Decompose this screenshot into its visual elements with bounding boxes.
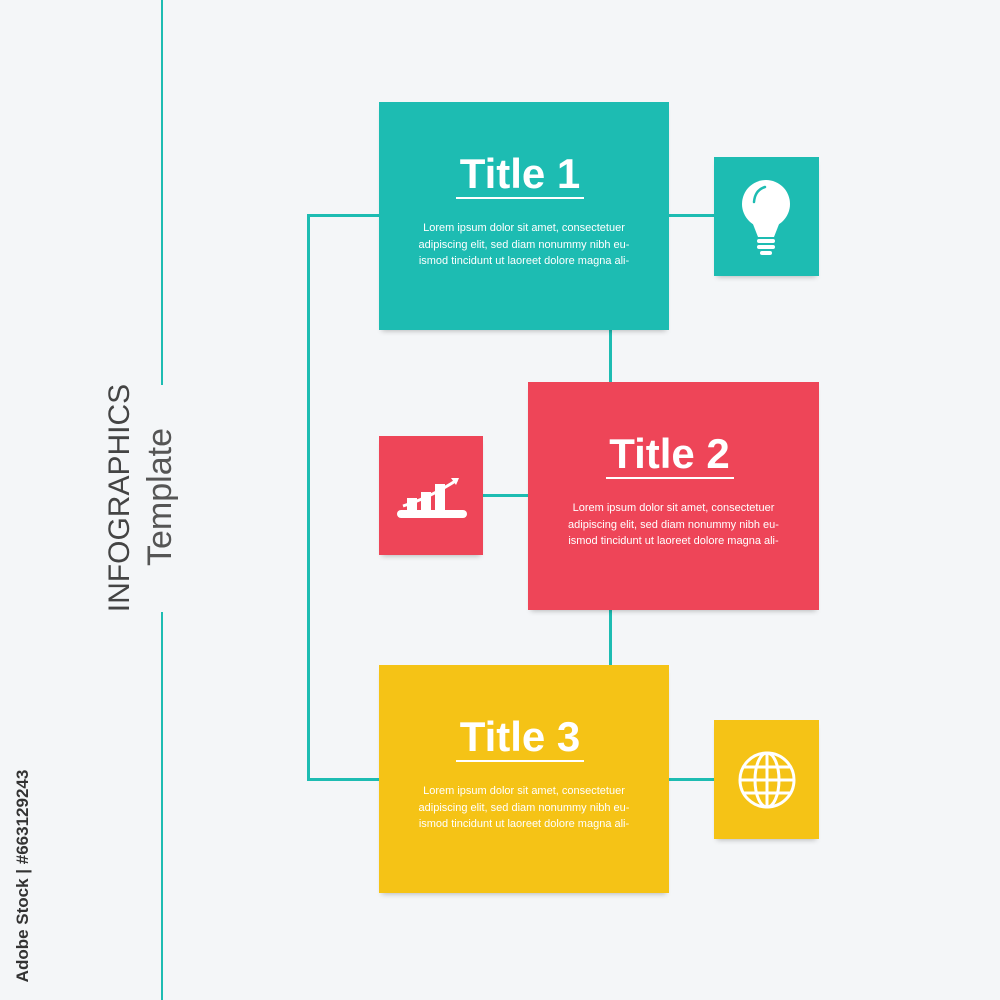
text block 2: ismod tincidunt ut laoreet dolore magna ali-: [568, 535, 779, 547]
heading: INFOGRAPHICS: INFOGRAPHICS: [103, 384, 136, 612]
text block 2: adipiscing elit, sed diam nonummy nibh eu-: [568, 518, 779, 530]
text block 1: ismod tincidunt ut laoreet dolore magna ali-: [419, 255, 629, 267]
text block 3: adipiscing elit, sed diam nonummy nibh eu-: [419, 802, 629, 814]
text block 2: Lorem ipsum dolor sit amet, consectetuer: [573, 502, 774, 514]
icon: growth chart: [379, 436, 483, 555]
icon: light bulb: [714, 157, 819, 276]
text block 1: Lorem ipsum dolor sit amet, consectetuer: [423, 222, 625, 234]
text block 3: Lorem ipsum dolor sit amet, consectetuer: [423, 785, 625, 797]
watermark id: Adobe Stock | #663129243: [13, 770, 32, 982]
panel: Title 2: [528, 382, 819, 610]
text block 1: adipiscing elit, sed diam nonummy nibh eu-: [419, 238, 629, 250]
text block 2: [568, 502, 779, 547]
subheading: Template: Template: [141, 428, 179, 566]
panel: Title 3: [379, 665, 669, 893]
text block 3: ismod tincidunt ut laoreet dolore magna ali-: [419, 818, 629, 830]
left vertical line top: [161, 0, 163, 385]
text block 1: [419, 222, 629, 267]
text block 3: [419, 785, 629, 830]
panel: Title 1: [379, 102, 669, 330]
icon: globe: [714, 720, 819, 839]
heading: Title 1: Title 1: [460, 150, 580, 197]
heading: Title 2: Title 2: [609, 430, 730, 477]
left vertical line bottom: [161, 612, 163, 1000]
heading: Title 3: Title 3: [460, 713, 580, 760]
